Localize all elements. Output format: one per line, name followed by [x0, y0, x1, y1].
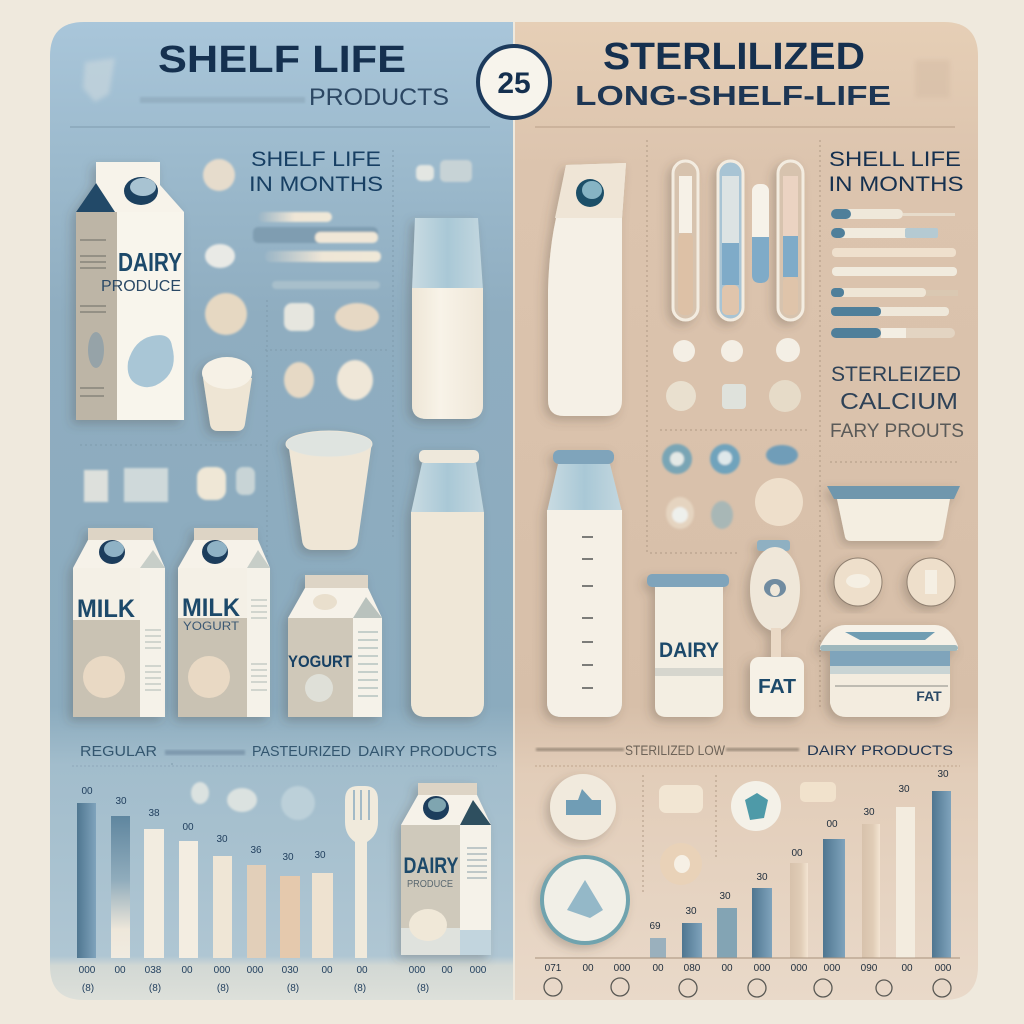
- header dividers: [70, 126, 490, 128]
- yogurt carton: [288, 575, 382, 717]
- disc: [755, 478, 803, 526]
- bar chart left: 00: [182, 822, 194, 833]
- panel: sterilized products: [515, 22, 978, 1000]
- bar chart left: 00: [81, 786, 93, 797]
- bar chart left: (8): [354, 983, 366, 994]
- heading: shelf life in months left: SHELF LIFE: [251, 148, 381, 171]
- carton: dairy small: PRODUCE: [407, 879, 453, 890]
- tub dairy: [647, 574, 729, 717]
- round icons right chart area: [542, 774, 836, 943]
- carton: dairy produce: DAIRY: [118, 247, 182, 277]
- heading: sterilized calcium: CALCIUM: [840, 388, 958, 414]
- heading: shelf life right: IN MONTHS: [828, 173, 964, 196]
- blurred subtitle: [140, 97, 305, 103]
- bar chart left: 000: [470, 965, 487, 976]
- bar chart right: 090: [861, 963, 878, 974]
- carton: dairy produce: PRODUCE: [101, 278, 181, 295]
- bar chart left: (8): [149, 983, 161, 994]
- bar chart left: 000: [79, 965, 96, 976]
- caption right: STERILIZED LOW: [625, 742, 726, 758]
- bar chart right: 071: [545, 963, 562, 974]
- bar chart right: 30: [937, 769, 949, 780]
- bar chart right: 69: [649, 921, 661, 932]
- milk carton 2: MILK: [182, 594, 240, 622]
- dotted dividers: [80, 150, 393, 765]
- bar chart right: 000: [754, 963, 771, 974]
- bar chart left: 000: [214, 965, 231, 976]
- carton: dairy small: DAIRY: [404, 853, 459, 878]
- subtitle: products: PRODUCTS: [309, 84, 449, 111]
- bar chart right: 30: [685, 906, 697, 917]
- shelf life bars left: [253, 212, 381, 289]
- carton: dairy produce: [76, 162, 184, 420]
- bar chart right: 080: [684, 963, 701, 974]
- title: sterilized: STERLILIZED: [603, 36, 865, 78]
- bar chart left: 30: [314, 850, 326, 861]
- bar chart left: 00: [321, 965, 333, 976]
- small icons mid-left: [84, 467, 255, 502]
- bar chart right: 00: [652, 963, 664, 974]
- milk carton 1: MILK: [77, 595, 135, 623]
- bar chart right: [535, 769, 960, 997]
- bar chart right: 000: [614, 963, 631, 974]
- tall bottle right: [548, 163, 626, 416]
- cup small: [202, 357, 252, 431]
- milk carton 2: YOGURT: [183, 619, 240, 633]
- footer ring icons right: [544, 978, 951, 997]
- caption left: REGULAR: [80, 743, 157, 760]
- bar chart right: 30: [898, 784, 910, 795]
- test tubes: [673, 161, 803, 320]
- bar chart right: 00: [826, 819, 838, 830]
- panel: regular products: [50, 22, 513, 1000]
- bar chart right: 30: [719, 891, 731, 902]
- heading: shelf life in months left: IN MONTHS: [249, 173, 383, 196]
- bar chart left: (8): [287, 983, 299, 994]
- blurred caption segment: [165, 750, 245, 755]
- test tube fills: [678, 176, 798, 315]
- heading: shelf life right: [828, 148, 964, 196]
- fat tub: [820, 625, 958, 717]
- bar chart left: 30: [115, 796, 127, 807]
- bottle top left: [412, 218, 483, 419]
- spoon and fat jar: FAT: [758, 676, 796, 698]
- bottle right tall: [547, 450, 622, 717]
- tray: [827, 486, 960, 541]
- bar chart right: 00: [901, 963, 913, 974]
- icon: right header: [915, 60, 950, 98]
- bar chart right: 00: [791, 848, 803, 859]
- bar chart left: (8): [417, 983, 429, 994]
- bar chart right: 00: [582, 963, 594, 974]
- carton: dairy small: [401, 783, 491, 955]
- heading: sterilized calcium: FARY PROUTS: [830, 421, 964, 442]
- bar chart left: 038: [145, 965, 162, 976]
- blurred caption segments: [536, 748, 799, 751]
- fat tub: FAT: [916, 688, 942, 704]
- bar chart right: 000: [791, 963, 808, 974]
- title: shelf life: SHELF LIFE: [158, 39, 406, 81]
- fork: [345, 786, 378, 958]
- bar chart left: 30: [282, 852, 294, 863]
- bar chart right: 00: [721, 963, 733, 974]
- bar chart right: 30: [863, 807, 875, 818]
- bar chart left: 000: [247, 965, 264, 976]
- caption left: PASTEURIZED: [252, 743, 351, 760]
- small beads and icons: [666, 338, 801, 412]
- tub dairy: DAIRY: [659, 639, 719, 662]
- caption right: [625, 742, 953, 758]
- bar chart left: 30: [216, 834, 228, 845]
- bar chart left: 00: [181, 965, 193, 976]
- icons mid right: [662, 444, 798, 529]
- bar chart left: 38: [148, 808, 160, 819]
- bar chart left: 36: [250, 845, 262, 856]
- cup large: [286, 431, 372, 550]
- caption left: [80, 743, 497, 760]
- bar chart left: 000: [409, 965, 426, 976]
- subtitle: long shelf life: LONG-SHELF-LIFE: [575, 80, 891, 111]
- caption left: DAIRY PRODUCTS: [358, 743, 497, 760]
- bar chart right: 30: [756, 872, 768, 883]
- heading: sterilized calcium: [830, 363, 964, 442]
- milk carton 1: [73, 528, 165, 717]
- small icons left top: [203, 159, 472, 400]
- small icons above chart: [191, 782, 315, 820]
- bar chart left: 00: [114, 965, 126, 976]
- bar chart left: (8): [82, 983, 94, 994]
- heading: shelf life in months left: [249, 148, 383, 196]
- bar chart left: 030: [282, 965, 299, 976]
- heading: sterilized calcium: STERLEIZED: [831, 363, 961, 386]
- small round icons: [834, 558, 955, 606]
- badge: 25: 25: [497, 67, 531, 100]
- caption right: DAIRY PRODUCTS: [807, 742, 953, 758]
- bar chart left: 00: [441, 965, 453, 976]
- bar chart right: 000: [824, 963, 841, 974]
- spoon and fat jar: [750, 540, 804, 717]
- heading: shelf life right: SHELL LIFE: [829, 148, 961, 171]
- bar chart right: 000: [935, 963, 952, 974]
- badge: 25: [478, 46, 550, 118]
- icon: left header: [83, 58, 115, 102]
- milk carton 2: [178, 528, 270, 717]
- bar chart left: (8): [217, 983, 229, 994]
- bar chart left: 00: [356, 965, 368, 976]
- dotted dividers right: [643, 140, 960, 895]
- milk bottle left bottom: [411, 450, 484, 717]
- shelf life bars right: [831, 209, 958, 338]
- yogurt carton: YOGURT: [288, 652, 353, 671]
- bar chart left: [77, 786, 487, 994]
